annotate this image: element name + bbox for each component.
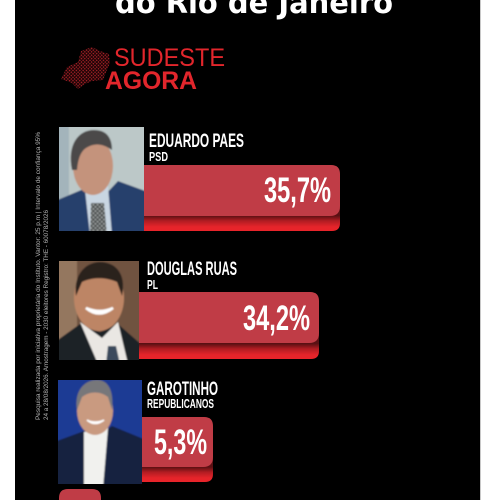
logo text: Agora: AGORA (105, 67, 197, 95)
candidate: Douglas Ruas (55, 257, 319, 364)
logo text: Sudeste: SUDESTE (114, 44, 225, 72)
name: DOUGLAS RUAS (147, 259, 237, 280)
photo: Douglas Ruas (59, 261, 139, 360)
name: EDUARDO PAES (149, 131, 244, 152)
photo: Garotinho (58, 380, 142, 484)
bar: Eduardo Paes (144, 165, 340, 231)
icon: hatched map (61, 47, 110, 89)
party: PL (147, 277, 158, 292)
bar: cropped next result (59, 489, 101, 500)
methodology note (35, 132, 50, 420)
value: 5,3% (154, 423, 207, 462)
value: 34,2% (243, 299, 310, 338)
bar: Douglas Ruas (139, 292, 319, 359)
candidate: Eduardo Paes (55, 123, 340, 235)
logo: Sudeste Agora (61, 44, 225, 95)
party: PSD (149, 149, 168, 164)
candidate: Garotinho (54, 376, 218, 488)
methodology note: 24 a 28/08/2026. Amostragem - 2030 eleitores Registro: THE - 60078/2026 (43, 210, 50, 420)
photo: Eduardo Paes (59, 127, 144, 231)
bar: Garotinho (142, 417, 213, 482)
methodology note: Pesquisa realizada por iniciativa proprietária do Instituto. Vantor: 25 p.m | Intervalo de confiança 95% (35, 132, 42, 420)
party: REPUBLICANOS (147, 396, 214, 411)
value: 35,7% (264, 171, 331, 210)
name: GAROTINHO (147, 379, 218, 400)
